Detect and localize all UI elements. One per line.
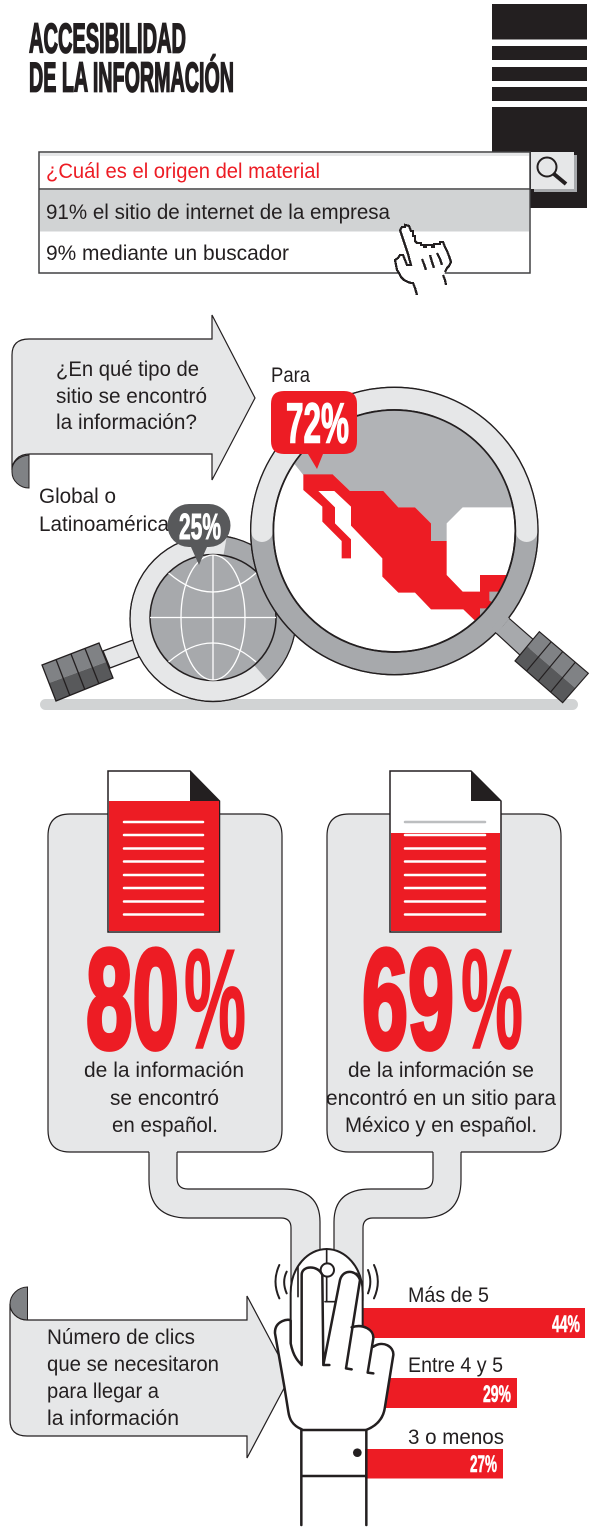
callout: 25%: 25% [179, 506, 221, 547]
arrow banner: clicks [10, 1287, 290, 1458]
banner text: que se necesitaron [47, 1353, 219, 1376]
caption: 69% [326, 1059, 556, 1137]
label: Global o Latinoamérica: Global o [39, 485, 116, 508]
small handle [42, 640, 139, 701]
panel: 80%: % [184, 920, 246, 1079]
banner text [56, 358, 207, 434]
large magnifier with map of Mexico [251, 387, 588, 703]
option: 9%: 9% mediante un buscador [46, 242, 289, 265]
motion lines [275, 1265, 378, 1298]
callout: 72%: 72% [286, 392, 349, 456]
banner text: la información? [56, 411, 197, 434]
panel: 69% [326, 771, 561, 1154]
figure: 69%: 69 [362, 920, 454, 1079]
icon: pointer hand [395, 225, 451, 295]
option: 91%: 91% el sitio de internet de la empresa [46, 201, 390, 224]
icon: hand on mouse [275, 1249, 393, 1525]
bar: 3 o menos: 27% [470, 1451, 497, 1478]
icon: document 80% [108, 771, 220, 932]
banner text [47, 1326, 219, 1430]
icon: document 69% [390, 771, 501, 932]
ground shadow [40, 699, 578, 710]
connector tubes [149, 1150, 461, 1300]
caption: 69%: de la información se [348, 1059, 534, 1082]
search box [39, 152, 577, 273]
search button [531, 152, 577, 192]
bar: 3 o menos: 3 o menos [408, 1426, 504, 1449]
callout: 72% [271, 391, 357, 469]
arrow banner: question [12, 315, 255, 488]
banner text: ¿En qué tipo de [56, 358, 199, 381]
wrist and cuff [301, 1430, 366, 1525]
bar: Más de 5: 44% [552, 1311, 580, 1338]
map [294, 410, 512, 620]
decorative black bars [492, 4, 587, 208]
title: ACCESIBILIDAD [29, 14, 186, 62]
bar: 3 o menos [365, 1426, 504, 1478]
panel: 69%: % [461, 920, 523, 1079]
globe [150, 554, 276, 680]
hand outline [275, 1267, 393, 1430]
callout: 25% [168, 504, 230, 565]
caption: 80%: de la información [84, 1059, 244, 1082]
bar: Entre 4 y 5: Entre 4 y 5 [408, 1354, 503, 1377]
caption: 80% [84, 1059, 244, 1137]
bar: Más de 5: Más de 5 [408, 1284, 489, 1307]
banner text: la información [47, 1407, 179, 1430]
title [29, 14, 234, 100]
label: Global o Latinoamérica: Latinoamérica [39, 513, 169, 536]
label: Global o Latinoamérica [39, 485, 169, 536]
caption: 80%: en español. [112, 1114, 218, 1137]
bar chart: number of clicks [360, 1284, 585, 1478]
infographic: DE LA INFORMACIÓN [29, 52, 234, 100]
bar: Más de 5 [360, 1284, 585, 1338]
label: Para: Para [271, 364, 310, 387]
lens ring [251, 387, 538, 675]
bar: Entre 4 y 5: 29% [483, 1381, 511, 1408]
banner text: sitio se encontró [56, 385, 207, 408]
small magnifier with globe [42, 536, 296, 702]
caption: 80%: se encontró [110, 1087, 219, 1110]
caption: 69%: encontró en un sitio para [326, 1087, 556, 1110]
large handle [496, 618, 588, 703]
panel: 80% [48, 771, 282, 1154]
figure: 80%: 80 [86, 920, 179, 1079]
banner text: Número de clics [47, 1326, 195, 1349]
banner text: para llegar a [47, 1380, 159, 1403]
bar: Entre 4 y 5 [380, 1354, 517, 1408]
banner curl [12, 455, 29, 488]
caption: 69%: México y en español. [345, 1114, 537, 1137]
search question: ¿Cuál es el origen del material [46, 160, 320, 183]
banner curl [10, 1287, 28, 1320]
mouse [291, 1249, 363, 1343]
